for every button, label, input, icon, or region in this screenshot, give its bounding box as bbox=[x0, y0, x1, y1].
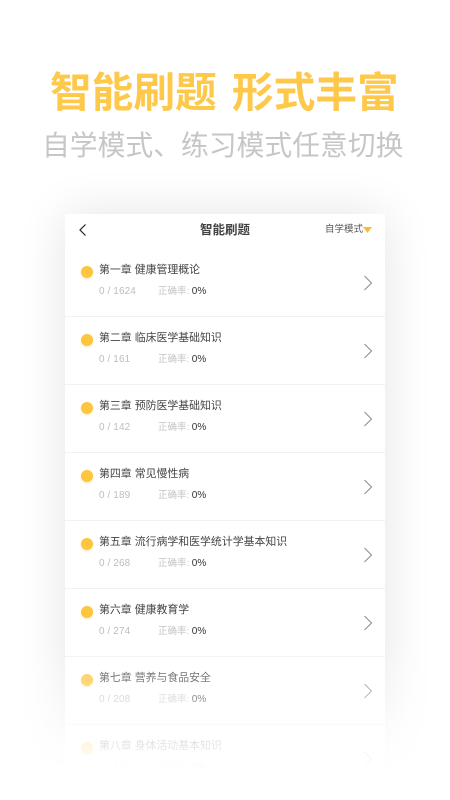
chapter row 1 bbox=[65, 249, 385, 317]
chapter row 8: 第八章 身体活动基本知识 bbox=[99, 740, 222, 752]
chapter row 6: 正确率: 0% bbox=[158, 626, 206, 636]
chapter row 2: 0 / 161 bbox=[99, 354, 130, 364]
chapter row 3: 0 / 142 bbox=[99, 422, 130, 432]
title bbox=[50, 69, 399, 116]
chapter row 4: 第四章 常见慢性病 bbox=[99, 468, 189, 480]
panel: chapter list phone screen bbox=[65, 214, 385, 800]
chapter row 8 bbox=[65, 725, 385, 793]
subtitle: 自学模式、练习模式任意切换 bbox=[42, 130, 403, 161]
bottom white fade overlay bbox=[0, 640, 450, 800]
title: 形式丰富 bbox=[232, 69, 399, 116]
chapter row 5: 第五章 流行病学和医学统计学基本知识 bbox=[99, 536, 287, 548]
title: 智能刷题 bbox=[50, 69, 217, 116]
chapter row 2 bbox=[65, 317, 385, 385]
chapter row 8: 正确率: 0% bbox=[158, 762, 206, 772]
chapter row 7: 0 / 208 bbox=[99, 694, 130, 704]
icon: dropdown triangle bbox=[363, 227, 372, 233]
chapter row 2: 正确率: 0% bbox=[158, 354, 206, 364]
chapter row 5: 正确率: 0% bbox=[158, 558, 206, 568]
chapter row 4: 正确率: 0% bbox=[158, 490, 206, 500]
mode selector label: 自学模式 bbox=[325, 224, 363, 235]
chapter row 1: 正确率: 0% bbox=[158, 286, 206, 296]
chapter row 5: 0 / 268 bbox=[99, 558, 130, 568]
navigation bar bbox=[79, 223, 372, 237]
chapter row 6: 0 / 274 bbox=[99, 626, 130, 636]
chapter row 4 bbox=[65, 453, 385, 521]
chapter row 6 bbox=[65, 589, 385, 657]
chapter row 8: 0 / 125 bbox=[99, 762, 130, 772]
chapter row 3: 正确率: 0% bbox=[158, 422, 206, 432]
chapter row 6: 第六章 健康教育学 bbox=[99, 604, 189, 616]
chapter row 3: 第三章 预防医学基础知识 bbox=[99, 400, 222, 412]
icon: back arrow bbox=[79, 224, 86, 236]
chapter row 2: 第二章 临床医学基础知识 bbox=[99, 332, 222, 344]
chapter row 7: 第七章 营养与食品安全 bbox=[99, 672, 211, 684]
chapter row 4: 0 / 189 bbox=[99, 490, 130, 500]
chapter row 7 bbox=[65, 657, 385, 725]
chapter row 5 bbox=[65, 521, 385, 589]
chapter row 7: 正确率: 0% bbox=[158, 694, 206, 704]
chapter row 1: 第一章 健康管理概论 bbox=[99, 264, 200, 276]
chapter row 1: 0 / 1624 bbox=[99, 286, 136, 296]
chapter row 3 bbox=[65, 385, 385, 453]
screen heading: 智能刷题 bbox=[200, 223, 250, 237]
